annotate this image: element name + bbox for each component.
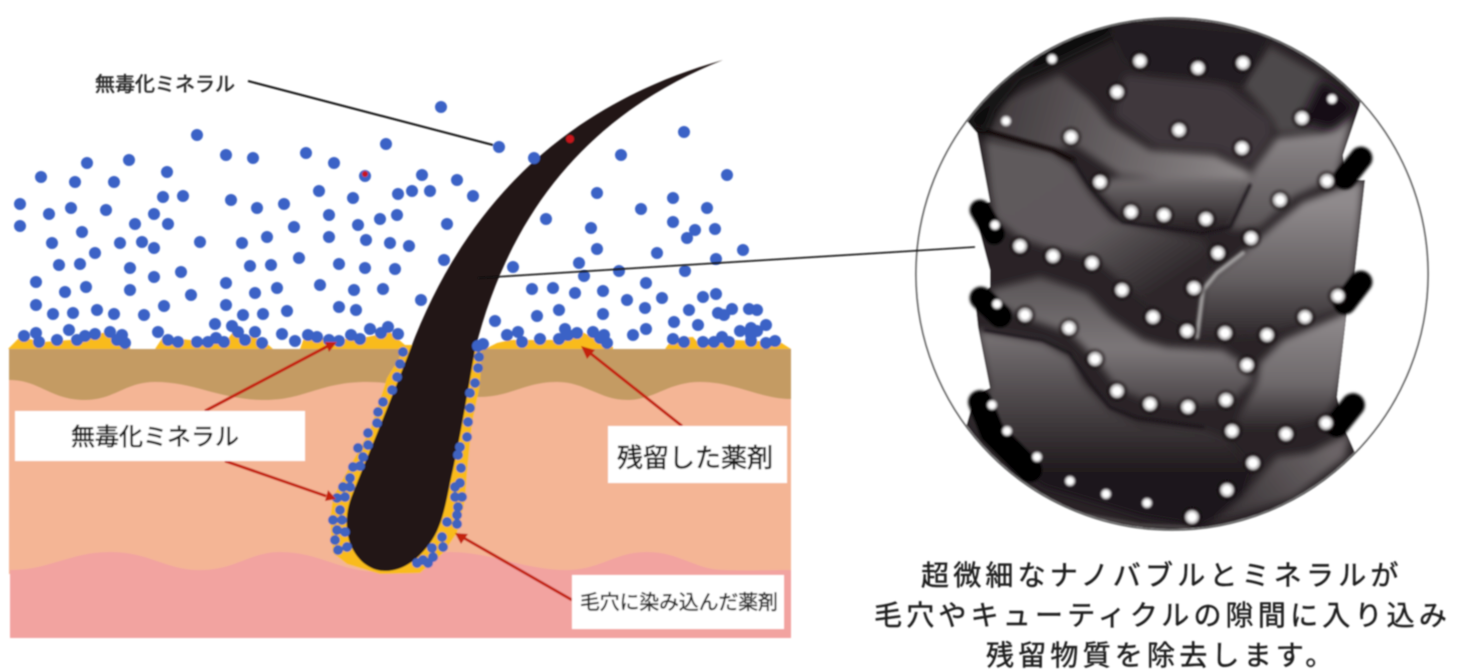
label box: detoxified mineral: 無毒化ミネラル (71, 424, 239, 451)
skin layer: epidermis brown band (9, 349, 791, 400)
label box: residual chemical: 残留した薬剤 (617, 443, 773, 473)
label: top mineral: 無毒化ミネラル (95, 73, 235, 96)
cuticle top central dark scale (1107, 20, 1270, 85)
residual chemical: yellow around follicle (330, 345, 482, 574)
black cuticle tips (980, 158, 1361, 470)
circle outline (916, 18, 1428, 530)
caption text (874, 560, 1451, 671)
cuticle dark upper right corner (1300, 78, 1360, 130)
residual chemical: yellow surface deposits (8, 332, 791, 349)
caption text: 残留物質を除去します。 (986, 640, 1337, 671)
leader line: top mineral label to particle (248, 81, 493, 145)
hair shaft and root (347, 60, 723, 571)
skin layer: deep pink tissue (10, 552, 791, 638)
panel: skin cross-section diagram (8, 60, 791, 638)
panel: magnified hair cuticle circle (916, 0, 1428, 540)
red specks (362, 135, 574, 177)
arrow: pore chemical label to follicle (455, 533, 572, 600)
label box: chemical soaked in pore: 毛穴に染み込んだ薬剤 (580, 592, 778, 614)
arrow: mineral label to follicle (225, 461, 336, 501)
nanobubble dots (992, 59, 1338, 517)
arrow: mineral label to surface (205, 342, 337, 411)
hair cuticle body (966, 18, 1375, 530)
label box: residual chemical (608, 426, 787, 483)
cuticle dark edges and light crack (975, 128, 1250, 527)
caption text: 毛穴やキューティクルの隙間に入り込み (874, 600, 1451, 631)
skin layer: dermis peach (9, 349, 791, 574)
cuticle dark top-left corner (968, 26, 1114, 137)
mineral dots: blue particles in follicle (333, 352, 479, 563)
caption text: 超微細なナノバブルとミネラルが (921, 560, 1403, 591)
label box: detoxified mineral (15, 411, 305, 461)
label box: chemical soaked in pore (572, 575, 784, 629)
leader line: hair to magnified circle (478, 247, 975, 278)
arrow: residual chemical label to surface (581, 346, 682, 426)
mineral dots: blue particles in air (20, 107, 775, 346)
cuticle scales shading (973, 47, 1363, 527)
